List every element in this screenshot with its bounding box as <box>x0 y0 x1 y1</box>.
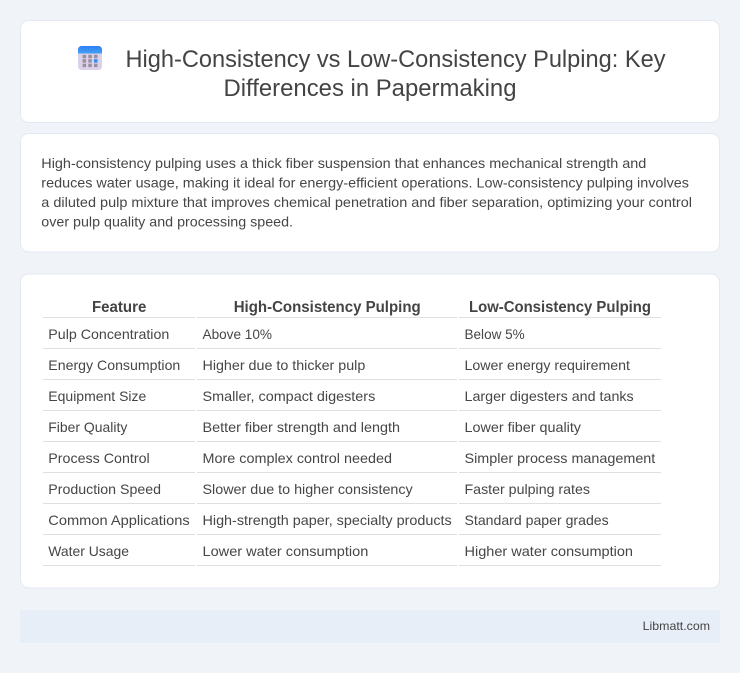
row: process control <box>48 450 655 466</box>
title: High-Consistency vs Low-Consistency Pulping: Key <box>126 46 666 73</box>
row: common applications: Standard paper grades <box>464 512 609 528</box>
row: energy consumption: Energy Consumption <box>48 357 180 373</box>
footer <box>20 610 720 643</box>
row: energy consumption: Higher due to thicker pulp <box>202 357 366 373</box>
table header row <box>92 299 651 316</box>
row: fiber quality: Fiber Quality <box>48 419 127 435</box>
row: water usage: Higher water consumption <box>464 543 633 559</box>
row: pulp concentration <box>48 326 525 342</box>
table header row: Feature <box>92 299 146 316</box>
summary text <box>41 155 692 230</box>
row: equipment size: Equipment Size <box>48 388 147 404</box>
row: fiber quality <box>48 419 581 435</box>
row: production speed: Production Speed <box>48 481 161 497</box>
row: fiber quality: Lower fiber quality <box>464 419 581 435</box>
panel: comparison table <box>20 274 720 588</box>
row: water usage: Water Usage <box>48 543 129 559</box>
table header row: Low-Consistency Pulping <box>469 299 651 316</box>
row: water usage: Lower water consumption <box>202 543 368 559</box>
summary text: High-consistency pulping uses a thick fiber suspension that enhances mechanical strength and <box>41 155 646 171</box>
row: fiber quality: Better fiber strength and length <box>202 419 400 435</box>
row: common applications: High-strength paper, specialty products <box>202 512 452 528</box>
row: common applications: Common Applications <box>48 512 190 528</box>
row: pulp concentration: Below 5% <box>464 326 525 342</box>
panel: summary <box>20 134 720 252</box>
footer text: Libmatt.com <box>643 619 710 633</box>
row: production speed: Slower due to higher consistency <box>202 481 413 497</box>
row: equipment size: Smaller, compact digesters <box>202 388 375 404</box>
title <box>126 46 666 102</box>
row: equipment size <box>48 388 634 404</box>
row: equipment size: Larger digesters and tanks <box>464 388 634 404</box>
row: production speed: Faster pulping rates <box>464 481 590 497</box>
row: process control: Process Control <box>48 450 150 466</box>
row: energy consumption <box>48 357 630 373</box>
row: pulp concentration: Above 10% <box>202 326 272 342</box>
table header row: High-Consistency Pulping <box>234 299 421 316</box>
row: pulp concentration: Pulp Concentration <box>48 326 169 342</box>
row: production speed <box>48 481 590 497</box>
row: process control: More complex control needed <box>202 450 392 466</box>
icon: calendar <box>78 46 102 70</box>
row: energy consumption: Lower energy requirement <box>464 357 630 373</box>
row: common applications <box>48 512 609 528</box>
panel: title header <box>20 20 720 122</box>
title: Differences in Papermaking <box>224 75 516 102</box>
summary text: reduces water usage, making it ideal for energy-efficient operations. Low-consistency pulping involves <box>41 174 689 190</box>
row: process control: Simpler process management <box>464 450 655 466</box>
summary text: over pulp quality and processing speed. <box>41 214 293 230</box>
row: water usage <box>48 543 633 559</box>
table row lines <box>43 317 661 566</box>
summary text: a diluted pulp mixture that improves chemical penetration and fiber separation, optimizing your control <box>41 194 692 210</box>
